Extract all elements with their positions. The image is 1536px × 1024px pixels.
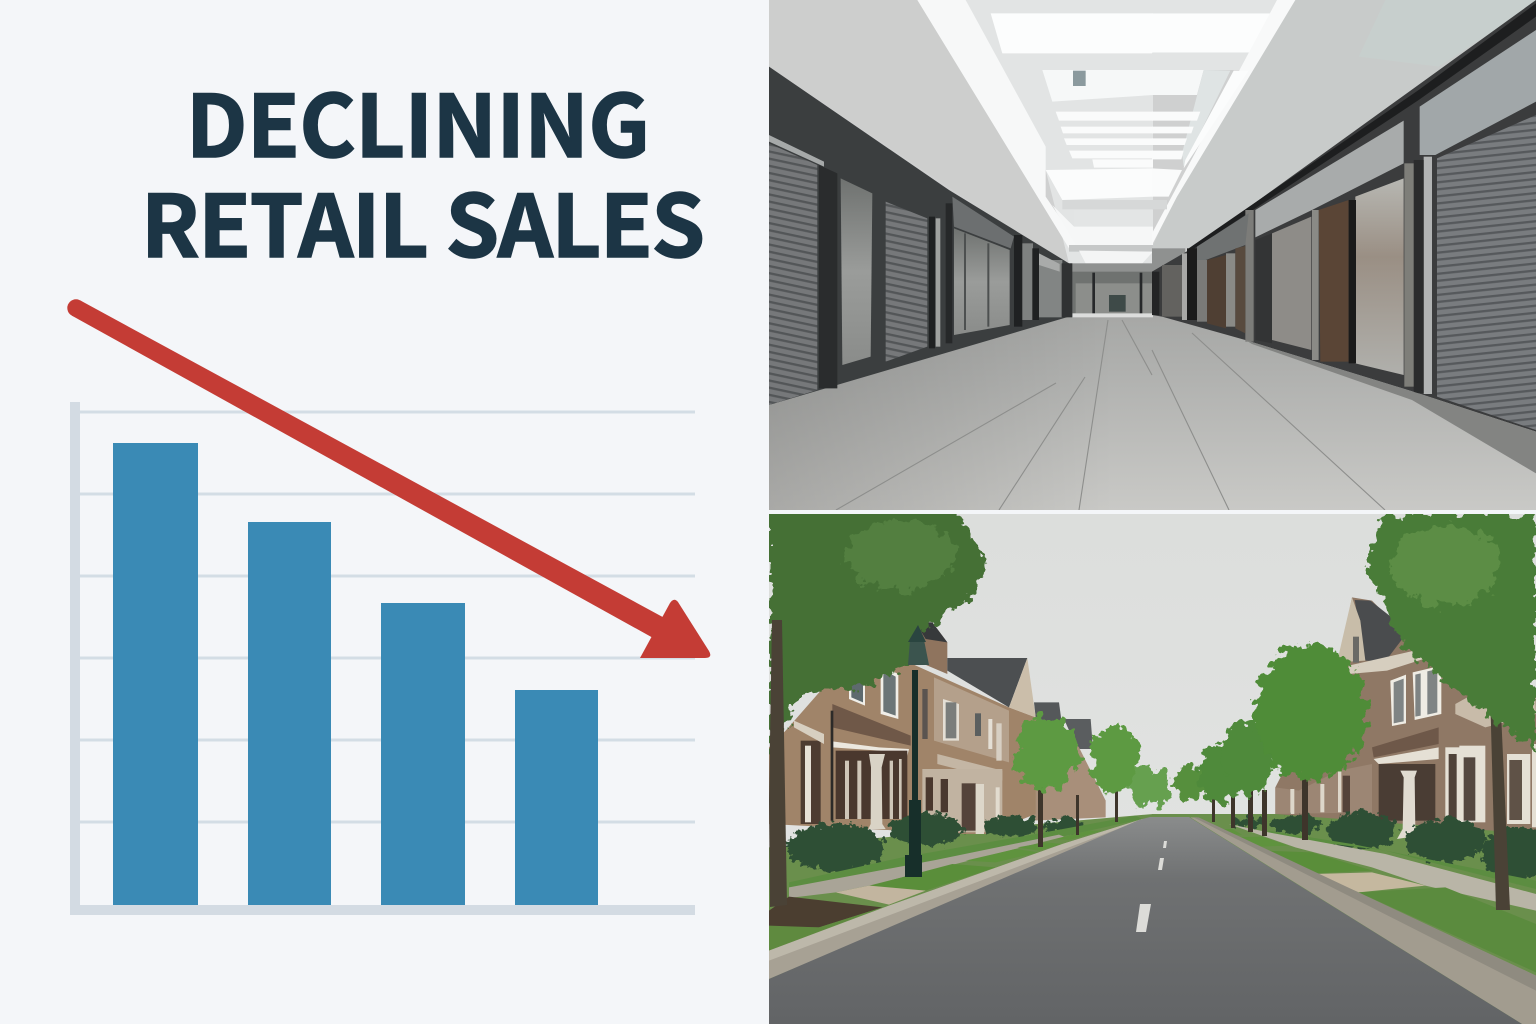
stone section xyxy=(934,677,1009,762)
tree trunks xyxy=(1038,770,1308,847)
right frame columns xyxy=(1404,157,1432,394)
store header xyxy=(1255,121,1404,237)
left lawn and paths xyxy=(769,816,1142,951)
bar 3 xyxy=(381,603,465,905)
skylight right edge xyxy=(1152,0,1295,272)
left wing windows xyxy=(794,711,833,824)
photo: quiet residential street xyxy=(769,505,1536,1024)
right lawns and paths xyxy=(1214,824,1536,972)
ground left xyxy=(769,814,1153,1024)
shutter header xyxy=(1420,30,1536,155)
slate roof xyxy=(947,658,1027,707)
title xyxy=(141,57,705,282)
far end glass xyxy=(1069,272,1153,317)
bar 1 xyxy=(113,443,198,905)
mall floor xyxy=(769,300,1536,510)
mall left half xyxy=(769,0,1153,405)
right hedges xyxy=(1229,812,1536,881)
left hedges xyxy=(787,813,1082,871)
left panel background xyxy=(0,0,769,1024)
distant and mid trees xyxy=(1015,644,1366,847)
street left half xyxy=(769,622,1153,1024)
bar chart xyxy=(70,402,695,915)
shutter xyxy=(1437,115,1536,430)
upper windows xyxy=(849,666,1002,761)
distant left shopfronts xyxy=(1014,235,1072,327)
left large tree xyxy=(769,505,985,907)
chart grid lines xyxy=(78,412,695,822)
distant right shopfronts xyxy=(1152,213,1249,333)
road centre markings xyxy=(1136,841,1167,932)
bar 2 xyxy=(248,522,331,905)
left ceiling xyxy=(769,0,1076,263)
tower xyxy=(916,622,947,674)
frame pieces xyxy=(929,203,952,348)
right wall base xyxy=(1152,0,1536,432)
sky xyxy=(769,514,1536,1024)
shutter 1 xyxy=(769,143,817,405)
floor reflection band xyxy=(1245,340,1536,473)
brown door xyxy=(1319,200,1349,362)
left main building xyxy=(769,622,1036,834)
glazed door 1 xyxy=(841,178,872,365)
shutter 2 xyxy=(886,202,927,362)
street lamp xyxy=(905,625,929,877)
glass pane 2 xyxy=(1272,217,1311,350)
right ground xyxy=(1152,814,1536,1024)
photo: empty shopping mall xyxy=(769,0,1536,510)
street right half xyxy=(1152,597,1536,1024)
glass shopfront xyxy=(952,197,1014,335)
tree canopies xyxy=(1015,644,1366,807)
right ceiling xyxy=(1152,0,1536,248)
chart axes xyxy=(70,402,695,915)
left distant houses xyxy=(1032,702,1106,821)
left curb xyxy=(769,819,1149,979)
right curb xyxy=(1190,817,1536,1024)
bar 4 xyxy=(515,690,598,905)
arrow: downward trend xyxy=(67,299,710,658)
mall right half xyxy=(1152,0,1536,473)
title: RETAIL SALES xyxy=(141,157,705,282)
skylight centre xyxy=(917,0,1153,273)
glass pane xyxy=(1355,178,1404,375)
black ceiling channel xyxy=(1189,3,1536,250)
left wall header xyxy=(769,67,1069,405)
right large tree xyxy=(1366,514,1536,910)
right building xyxy=(1275,597,1536,839)
portico 2 xyxy=(922,754,1002,834)
title: DECLINING xyxy=(186,57,650,182)
portico 1 xyxy=(832,704,911,829)
road xyxy=(769,817,1522,1024)
